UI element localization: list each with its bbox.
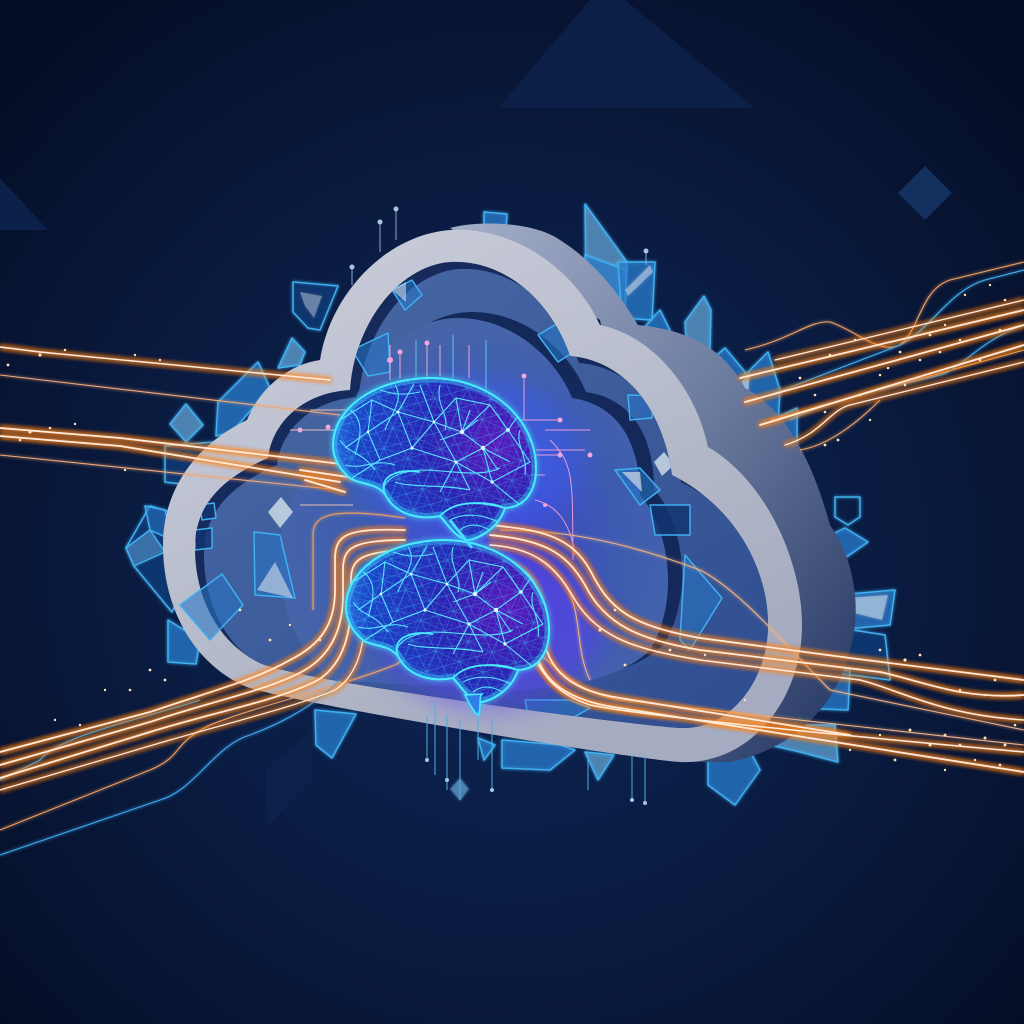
brain: lower <box>338 532 558 715</box>
data lines: upper left <box>0 347 330 380</box>
thin lines: upper right <box>745 262 1024 450</box>
crystals behind cloud <box>126 204 895 805</box>
thin lines: lower right <box>500 530 1024 745</box>
cloud: recessed inner panel <box>195 262 768 728</box>
data lines: bottom centre to lower right <box>487 560 850 735</box>
data lines: upper right bundle <box>740 310 1024 425</box>
cloud: extruded side <box>450 224 856 762</box>
circuit pins above and below brains <box>290 206 648 805</box>
crystals: right cluster <box>700 348 895 710</box>
thin lines: left <box>0 375 340 490</box>
inner cloud layer <box>279 318 668 690</box>
crystal overlapping ring <box>180 574 243 640</box>
thin lines: lower left <box>0 513 420 830</box>
cloud: white ring face <box>163 230 802 762</box>
brain stem connector <box>450 520 472 548</box>
scattered data particles <box>7 284 1016 771</box>
brain: upper <box>325 370 545 545</box>
data lines: lower left bundle <box>0 530 405 752</box>
data lines: right of brain to lower right <box>490 525 1024 680</box>
crystals: top cluster <box>484 204 711 352</box>
thin circuit lines <box>0 262 1024 855</box>
crystals inside cloud <box>195 280 722 725</box>
inner cloud shadow layer <box>430 312 682 668</box>
purple halo behind brains <box>358 378 602 707</box>
crystals: bottom cluster <box>315 710 838 805</box>
glowing orange data lines <box>0 300 1024 790</box>
faint background shapes <box>0 0 952 825</box>
crystals: left cluster <box>126 282 338 664</box>
data lines: middle left <box>0 428 355 492</box>
thin lines: blue upper right <box>770 270 1024 420</box>
thin lines: blue lower left <box>0 680 340 855</box>
